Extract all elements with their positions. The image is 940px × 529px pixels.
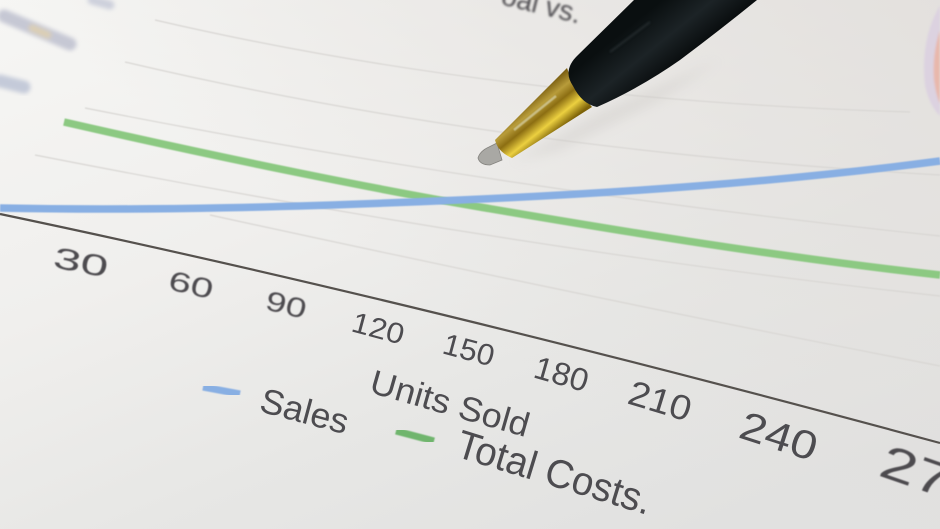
x-axis tick labels: 210 xyxy=(624,373,696,429)
x-axis tick labels: 150 xyxy=(439,328,498,373)
chart grid lines xyxy=(35,20,940,366)
x-axis tick labels: 180 xyxy=(530,349,593,399)
x-axis tick labels: 27 xyxy=(874,434,940,508)
barrel highlight xyxy=(610,22,650,52)
x-axis tick labels: 30 xyxy=(51,241,111,284)
sales line (blue) xyxy=(0,161,940,209)
finger at right edge xyxy=(924,5,940,116)
legend swatch: sales xyxy=(203,387,240,394)
gold highlight xyxy=(514,96,556,130)
x-axis title: Units Sold xyxy=(366,363,534,445)
x-axis tick labels: 240 xyxy=(734,404,823,470)
pen tip xyxy=(478,143,502,165)
legend: Sales xyxy=(256,381,353,442)
gold cone xyxy=(495,68,592,158)
pen xyxy=(478,0,757,165)
black barrel xyxy=(569,0,757,107)
pen shadow xyxy=(512,60,720,162)
blurred y-axis labels xyxy=(0,0,110,87)
legend: Total Costs. xyxy=(451,423,657,524)
x axis line xyxy=(0,214,940,443)
legend swatch: total costs xyxy=(396,431,434,441)
total costs line (green) xyxy=(64,122,940,275)
x-axis tick labels: 60 xyxy=(166,265,216,305)
x-axis tick labels: 120 xyxy=(348,307,408,351)
x-axis tick labels xyxy=(51,241,940,508)
legend xyxy=(203,381,657,524)
x-axis tick labels: 90 xyxy=(263,285,310,325)
